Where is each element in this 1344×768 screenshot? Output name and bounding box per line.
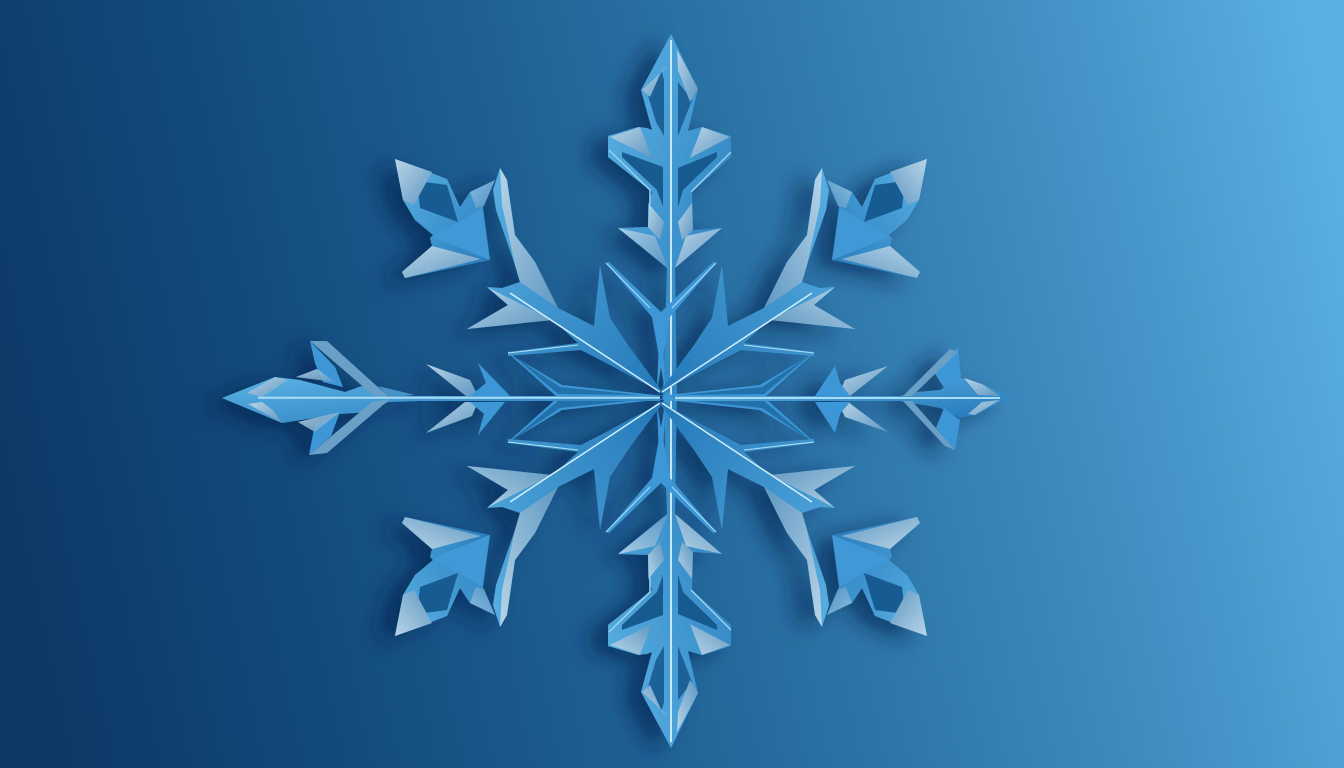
snowflake bbox=[222, 34, 1012, 748]
lower-right diagonal arm bbox=[657, 399, 927, 636]
upper-left diagonal arm bbox=[395, 159, 665, 396]
right horizontal arm bbox=[675, 347, 1012, 450]
centre point bbox=[662, 392, 674, 404]
lower-left diagonal arm bbox=[395, 399, 665, 636]
left horizontal arm bbox=[222, 341, 660, 455]
bottom vertical arm bbox=[608, 384, 731, 748]
upper-right diagonal arm bbox=[657, 159, 927, 396]
top vertical arm bbox=[608, 34, 731, 398]
